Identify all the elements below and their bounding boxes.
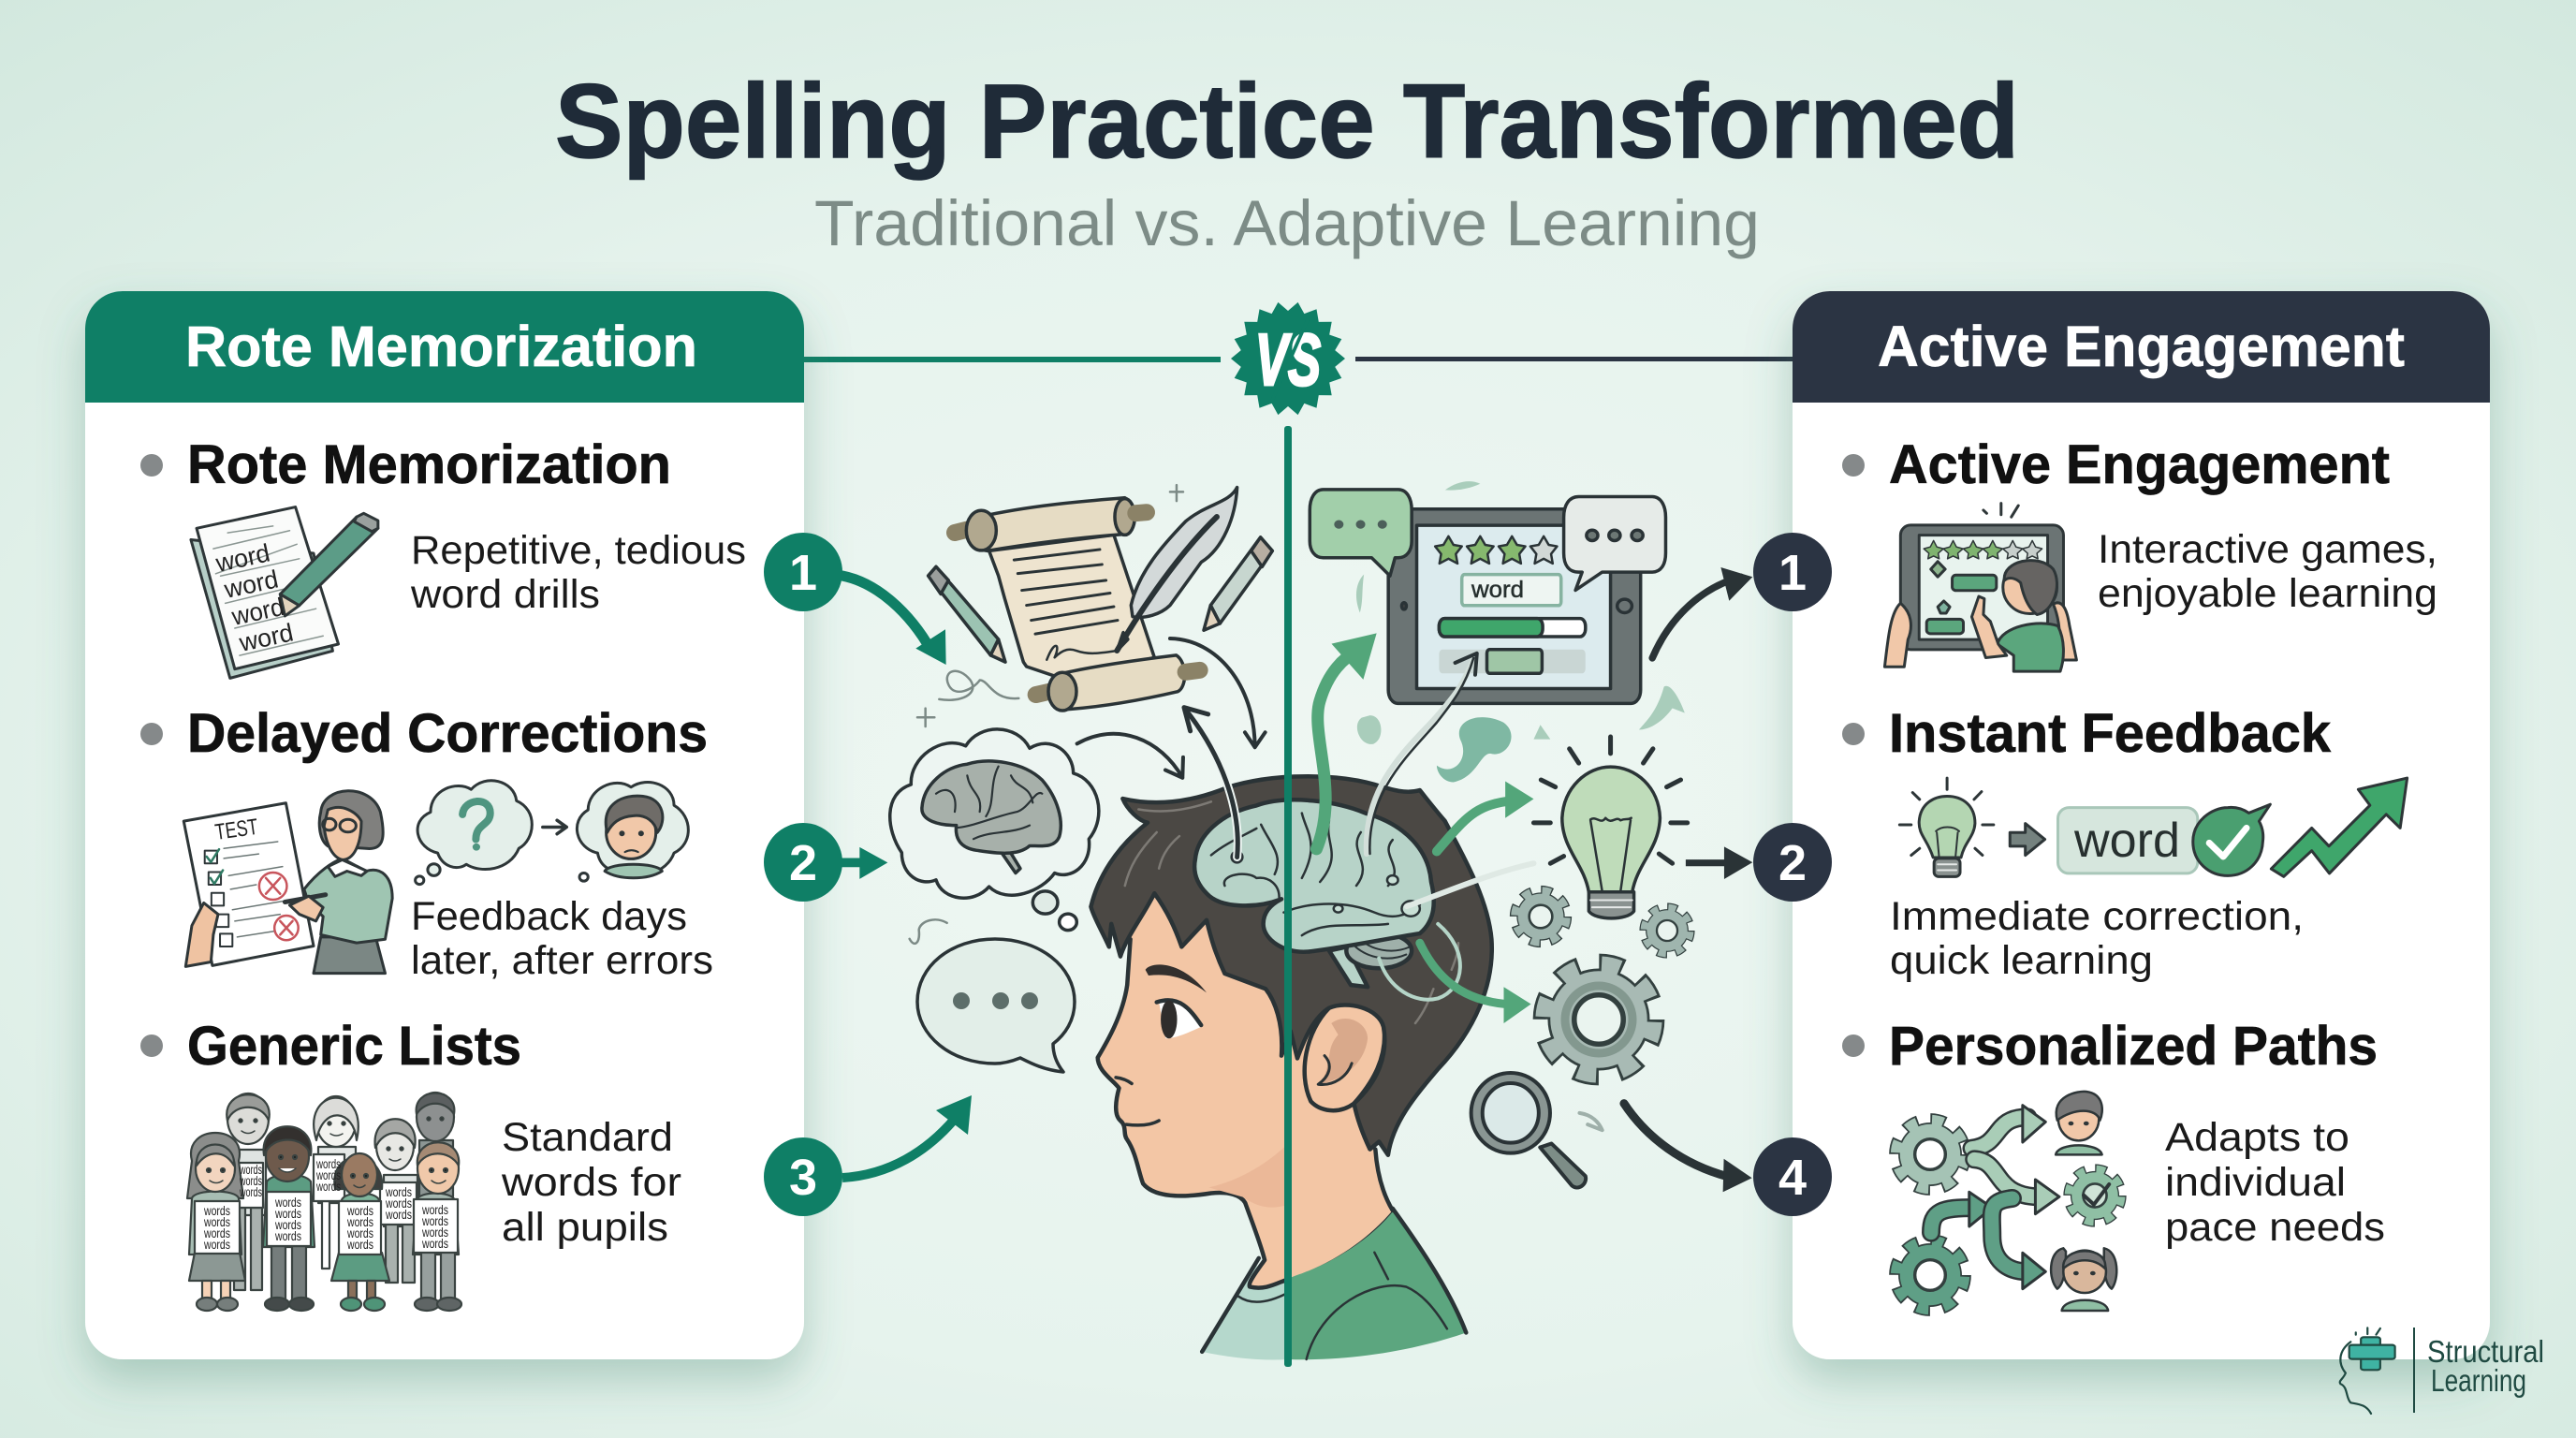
pupil: boy with light hair bbox=[413, 1142, 461, 1311]
number badge: left 2: 2 bbox=[789, 835, 817, 891]
arrow: brain to tablet green bbox=[1316, 633, 1377, 849]
word lists on signs: words bbox=[239, 1184, 262, 1199]
panel header bbox=[85, 291, 804, 403]
word lists on signs: words bbox=[421, 1202, 448, 1217]
text: personalized description: pace needs bbox=[2165, 1205, 2385, 1250]
nose and mouth bbox=[1116, 1078, 1159, 1125]
word lists on signs: words bbox=[274, 1217, 301, 1232]
icon: bulb, word check and rising arrow: word bbox=[2073, 814, 2180, 868]
item: generic lists heading: Generic Lists bbox=[187, 1016, 521, 1077]
word lists on signs: words bbox=[346, 1225, 373, 1240]
pupil: boy with curly hair bbox=[263, 1126, 315, 1311]
number badge: left 1: 1 bbox=[789, 545, 817, 601]
logo wordmark: Learning bbox=[2431, 1363, 2526, 1398]
word lists on signs bbox=[203, 1156, 448, 1252]
item: instant feedback heading: Instant Feedback bbox=[1889, 703, 2332, 764]
teal speech squiggle bbox=[1437, 717, 1512, 783]
speech bubble with dots bbox=[917, 939, 1075, 1072]
text: active description: Interactive games, bbox=[2098, 527, 2437, 572]
arrow: tablet to badge 1 bbox=[1652, 567, 1752, 658]
icon: word sheet and pencil: word bbox=[236, 618, 296, 657]
subtitle: Traditional vs. Adaptive Learning bbox=[814, 187, 1760, 259]
word lists on signs: words bbox=[203, 1214, 230, 1229]
word lists on signs: words bbox=[239, 1173, 262, 1188]
item: rote memorization heading: Rote Memorization bbox=[187, 434, 671, 495]
text: generic lists description: words for bbox=[501, 1160, 681, 1205]
icon: quill feather bbox=[1117, 488, 1237, 651]
hair highlights bbox=[1125, 801, 1458, 1023]
title: Spelling Practice Transformed bbox=[555, 63, 2019, 180]
icon: lightbulb bbox=[1533, 737, 1688, 918]
text: delayed description: later, after errors bbox=[411, 938, 713, 983]
number badge: right 2: 2 bbox=[1778, 835, 1807, 891]
word lists on signs: words bbox=[239, 1162, 262, 1177]
word lists on signs: words bbox=[421, 1225, 448, 1240]
arrow: 3 into speech bubble bbox=[842, 1095, 972, 1178]
word lists on signs: words bbox=[315, 1179, 341, 1194]
icon: grey chat bubble bbox=[1564, 497, 1665, 590]
number badge: left 3: 3 bbox=[789, 1150, 817, 1206]
text: delayed description bbox=[411, 894, 713, 983]
connector line: VS to right header bbox=[1355, 357, 1795, 361]
thought cloud with brain bbox=[890, 729, 1099, 931]
faint mark bbox=[1579, 1113, 1603, 1130]
text: active description: enjoyable learning bbox=[2098, 571, 2437, 616]
neck shading bbox=[1208, 1146, 1288, 1208]
icon: small gear right bbox=[1645, 908, 1690, 953]
icon: gears branching to individual learners bbox=[1896, 1092, 2121, 1311]
logo: Structural Learning bbox=[2340, 1328, 2544, 1414]
arrow: brain to bulb bbox=[1437, 781, 1533, 851]
number badge: left 1 bbox=[764, 533, 842, 611]
illustration: boy head in profile bbox=[1090, 776, 1492, 1360]
icon: teacher marking a test: TEST bbox=[213, 814, 260, 845]
squiggle and plus marks bbox=[910, 485, 1183, 944]
arrows: between scroll and brain bbox=[1077, 638, 1266, 858]
text: personalized description bbox=[2165, 1115, 2385, 1250]
number badge: right 1: 1 bbox=[1778, 545, 1807, 601]
arrow: brain to gear bbox=[1420, 943, 1531, 1023]
arrows and magnifier lower right bbox=[1420, 943, 1752, 1192]
panel: active engagement bbox=[1793, 291, 2490, 1359]
text: active description bbox=[2098, 527, 2437, 616]
word lists on signs: words bbox=[274, 1195, 301, 1210]
brain inside head bbox=[1194, 800, 1434, 987]
word lists on signs: words bbox=[203, 1237, 230, 1252]
arrow: 2 into thought cloud bbox=[840, 847, 887, 879]
text: delayed description: Feedback days bbox=[411, 894, 687, 939]
logo wordmark: Structural bbox=[2427, 1334, 2544, 1369]
word lists on signs: words bbox=[203, 1225, 230, 1240]
icon: green chat bubble bbox=[1310, 490, 1412, 576]
word lists on signs: words bbox=[346, 1237, 373, 1252]
word lists on signs: words bbox=[385, 1184, 412, 1199]
icon: small gear left bbox=[1515, 891, 1566, 942]
icon: thought clouds, feedback delayed bbox=[416, 781, 688, 885]
panel card bbox=[85, 291, 804, 1359]
shirt bbox=[1202, 1209, 1466, 1360]
arrow: brain to tablet grey bbox=[1367, 653, 1477, 854]
word lists on signs: words bbox=[421, 1236, 448, 1251]
VS badge bbox=[1231, 302, 1345, 415]
arrow: bulb to badge 2 bbox=[1686, 846, 1752, 879]
pupil: girl with long hair bbox=[187, 1133, 245, 1311]
panel header: Active Engagement bbox=[1878, 315, 2405, 378]
text: rote description: word drills bbox=[410, 572, 600, 617]
grey neural link bbox=[1407, 863, 1533, 906]
panel header: Rote Memorization bbox=[185, 315, 697, 378]
text: feedback description: Immediate correction, bbox=[1890, 894, 2304, 939]
text: generic lists description bbox=[501, 1115, 681, 1250]
number badge: left 3 bbox=[764, 1137, 842, 1216]
icon: teacher marking a test bbox=[183, 791, 392, 974]
text: personalized description: Adapts to bbox=[2165, 1115, 2349, 1160]
number badge: left 2 bbox=[764, 823, 842, 902]
faint floating marks bbox=[1356, 481, 1685, 744]
icon: group of pupils with the same word lists bbox=[187, 1093, 461, 1311]
VS badge: VS bbox=[1255, 318, 1321, 401]
word lists on signs: words bbox=[274, 1206, 301, 1221]
logo head and cross icon bbox=[2340, 1328, 2395, 1414]
word lists on signs: words bbox=[203, 1203, 230, 1218]
text: feedback description: quick learning bbox=[1890, 938, 2153, 983]
arrow: toward badge 4 bbox=[1624, 1104, 1752, 1192]
skin bbox=[1098, 863, 1393, 1287]
back row pupils bbox=[227, 1093, 454, 1290]
vertical divider bbox=[1284, 426, 1292, 1367]
pupil: girl in green bbox=[331, 1153, 389, 1311]
illustration: traditional learning cluster bbox=[840, 485, 1272, 944]
number badge: right 4 bbox=[1753, 1137, 1832, 1216]
panel header bbox=[1793, 291, 2490, 403]
light neural loop bbox=[1379, 924, 1460, 1000]
illustration: adaptive learning cluster bbox=[1310, 481, 1752, 918]
item: delayed corrections heading: Delayed Corrections bbox=[187, 703, 708, 764]
hair bbox=[1090, 776, 1492, 1155]
icon: bulb, word check and rising arrow bbox=[1899, 778, 2408, 876]
icon: word sheet and pencil bbox=[191, 507, 378, 678]
icon: right pencil bbox=[1204, 537, 1272, 630]
arrow: 1 into scroll bbox=[842, 576, 946, 665]
text: generic lists description: Standard bbox=[502, 1115, 673, 1160]
icon: left pencil bbox=[929, 566, 1005, 662]
word lists on signs: words bbox=[315, 1156, 341, 1171]
icon: parchment scroll bbox=[955, 498, 1200, 711]
icon: large gear bbox=[1544, 965, 1653, 1074]
word lists on signs: words bbox=[385, 1207, 412, 1222]
number badge: right 2 bbox=[1753, 823, 1832, 902]
word lists on signs: words bbox=[274, 1228, 301, 1243]
icon: word sheet and pencil: word bbox=[212, 538, 272, 578]
ear bbox=[1305, 1004, 1384, 1110]
text: rote description bbox=[410, 528, 746, 617]
panel card bbox=[1793, 291, 2490, 1359]
text: generic lists description: all pupils bbox=[502, 1205, 668, 1250]
word lists on signs: words bbox=[315, 1167, 341, 1182]
logo wordmark bbox=[2427, 1334, 2544, 1398]
word lists on signs: words bbox=[346, 1214, 373, 1229]
logo divider bbox=[2413, 1328, 2415, 1413]
panel: rote memorization bbox=[85, 291, 804, 1359]
icon: tablet with game bbox=[1388, 509, 1641, 703]
word lists on signs: words bbox=[346, 1203, 373, 1218]
number badge: right 4: 4 bbox=[1778, 1150, 1807, 1206]
icon: magnifying glass bbox=[1471, 1073, 1586, 1187]
word lists on signs: words bbox=[385, 1196, 412, 1211]
item: active engagement heading: Active Engagement bbox=[1889, 434, 2390, 495]
icon: word sheet and pencil: word bbox=[221, 565, 281, 604]
text: personalized description: individual bbox=[2165, 1160, 2346, 1205]
word lists on signs: words bbox=[421, 1213, 448, 1228]
text: feedback description bbox=[1890, 894, 2304, 983]
icon: child playing on a tablet bbox=[1884, 504, 2076, 671]
connector line: left header to VS bbox=[800, 357, 1221, 362]
eye and brow bbox=[1146, 964, 1207, 1038]
item: personalized paths heading: Personalized Paths bbox=[1889, 1016, 2378, 1077]
icon: word sheet and pencil: word bbox=[228, 593, 286, 631]
tablet word label: word bbox=[1471, 577, 1524, 603]
face outline bbox=[1098, 939, 1393, 1288]
number badge: right 1 bbox=[1753, 533, 1832, 611]
text: rote description: Repetitive, tedious bbox=[411, 528, 746, 573]
